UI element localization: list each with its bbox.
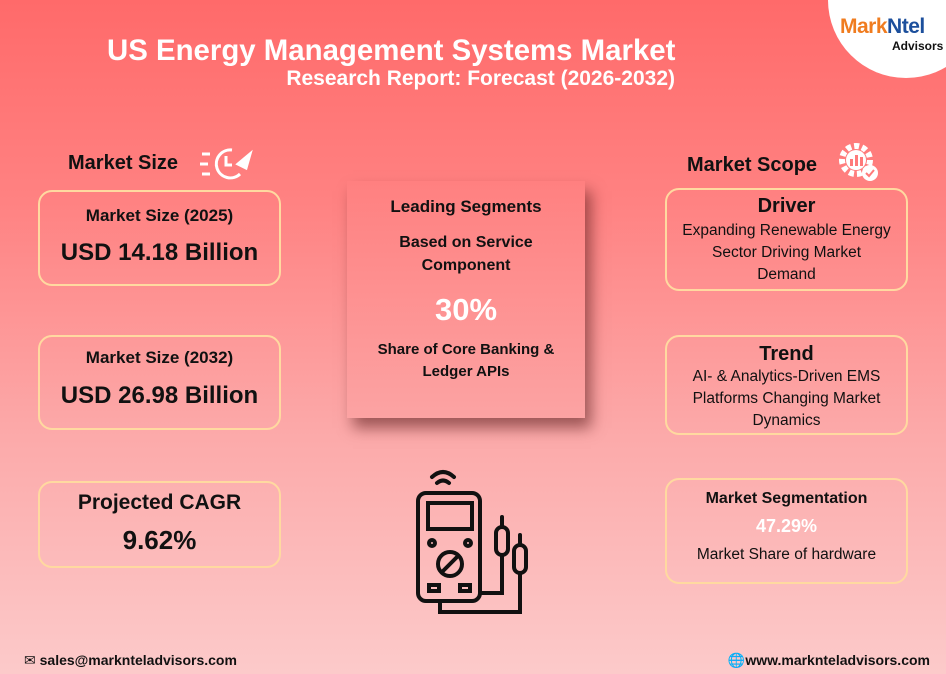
subtitle: Research Report: Forecast (2026-2032)	[286, 67, 675, 90]
card: market size 2032: USD 26.98 Billion	[61, 382, 258, 409]
icon: gear check	[839, 143, 878, 181]
title: US Energy Management Systems Market	[107, 34, 675, 67]
footer: website: 🌐www.marknteladvisors.com	[728, 652, 930, 668]
icon: multimeter	[416, 470, 528, 614]
card: driver: Driver	[758, 195, 815, 217]
card: segmentation: 47.29%	[756, 516, 817, 536]
card: trend	[665, 335, 908, 435]
card: segmentation	[665, 478, 908, 584]
card: market size 2032	[38, 335, 281, 430]
card: market size 2025	[38, 190, 281, 286]
logo: Advisors	[892, 39, 943, 53]
card: segmentation: Market Share of hardware	[697, 546, 876, 563]
panel: leading segments: Ledger APIs	[423, 363, 509, 380]
panel: leading segments: Share of Core Banking &	[378, 341, 554, 358]
card: driver: Demand	[757, 266, 816, 283]
card: market size 2032: Market Size (2032)	[86, 348, 233, 367]
card: segmentation: Market Segmentation	[706, 490, 867, 507]
heading: market size: Market Size	[68, 152, 178, 174]
card: trend: Platforms Changing Market	[693, 390, 880, 407]
card: trend: Dynamics	[752, 412, 821, 429]
icon: clock rocket	[200, 148, 253, 180]
card: driver: Sector Driving Market	[712, 244, 861, 261]
logo: MarkNtel	[840, 15, 925, 38]
panel: leading segments: 30%	[435, 292, 497, 327]
panel: leading segments: Based on Service	[399, 234, 533, 251]
panel: leading segments	[347, 181, 585, 418]
card: CAGR: 9.62%	[123, 525, 196, 555]
card: CAGR	[38, 481, 281, 568]
card: driver: Expanding Renewable Energy	[682, 222, 891, 239]
card: trend: Trend	[759, 343, 814, 365]
footer: email: ✉ sales@marknteladvisors.com	[24, 652, 237, 668]
heading: market scope: Market Scope	[687, 154, 817, 176]
logo	[828, 0, 946, 78]
panel: leading segments: Component	[422, 257, 510, 274]
card: driver	[665, 188, 908, 291]
card: market size 2025: USD 14.18 Billion	[61, 239, 258, 266]
card: trend: AI- & Analytics-Driven EMS	[693, 368, 880, 385]
panel: leading segments: Leading Segments	[390, 197, 542, 216]
card: CAGR: Projected CAGR	[78, 491, 241, 514]
card: market size 2025: Market Size (2025)	[86, 206, 233, 225]
